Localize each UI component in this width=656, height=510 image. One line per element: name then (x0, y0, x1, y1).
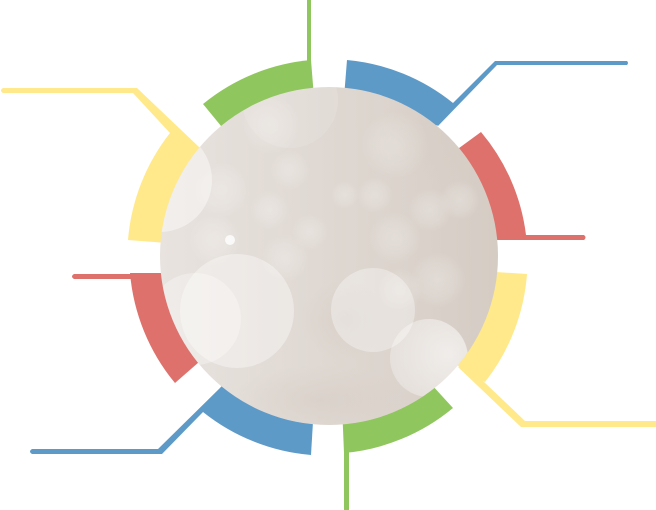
connector: top green line (307, 0, 311, 62)
segment: top-right blue (343, 60, 453, 148)
segment: lower-right yellow (440, 271, 527, 382)
glint (225, 235, 235, 245)
central bokeh circle (160, 87, 498, 425)
segment: bottom green (342, 372, 453, 453)
segment: left red (130, 273, 215, 383)
bubble: large left (180, 254, 294, 368)
connector: upper-left yellow line (1, 88, 199, 155)
segment: right red (440, 132, 526, 240)
bubble: centre right (331, 268, 415, 352)
connector: lower-right yellow line (458, 360, 656, 427)
connector: lower-left blue line (30, 387, 225, 454)
segment: lower-left blue (203, 366, 314, 455)
connector: left red line (72, 274, 135, 279)
connector: bottom green line (344, 450, 349, 510)
segment: top green (203, 60, 315, 143)
connector: top-right blue line (425, 61, 628, 126)
bubble: top (242, 52, 338, 148)
segment: upper-left yellow (128, 133, 220, 244)
bubble: lower right (390, 319, 468, 397)
connector: right red line (520, 235, 586, 240)
bubble: upper left (162, 147, 212, 232)
bubble: overlapping left (162, 273, 211, 364)
